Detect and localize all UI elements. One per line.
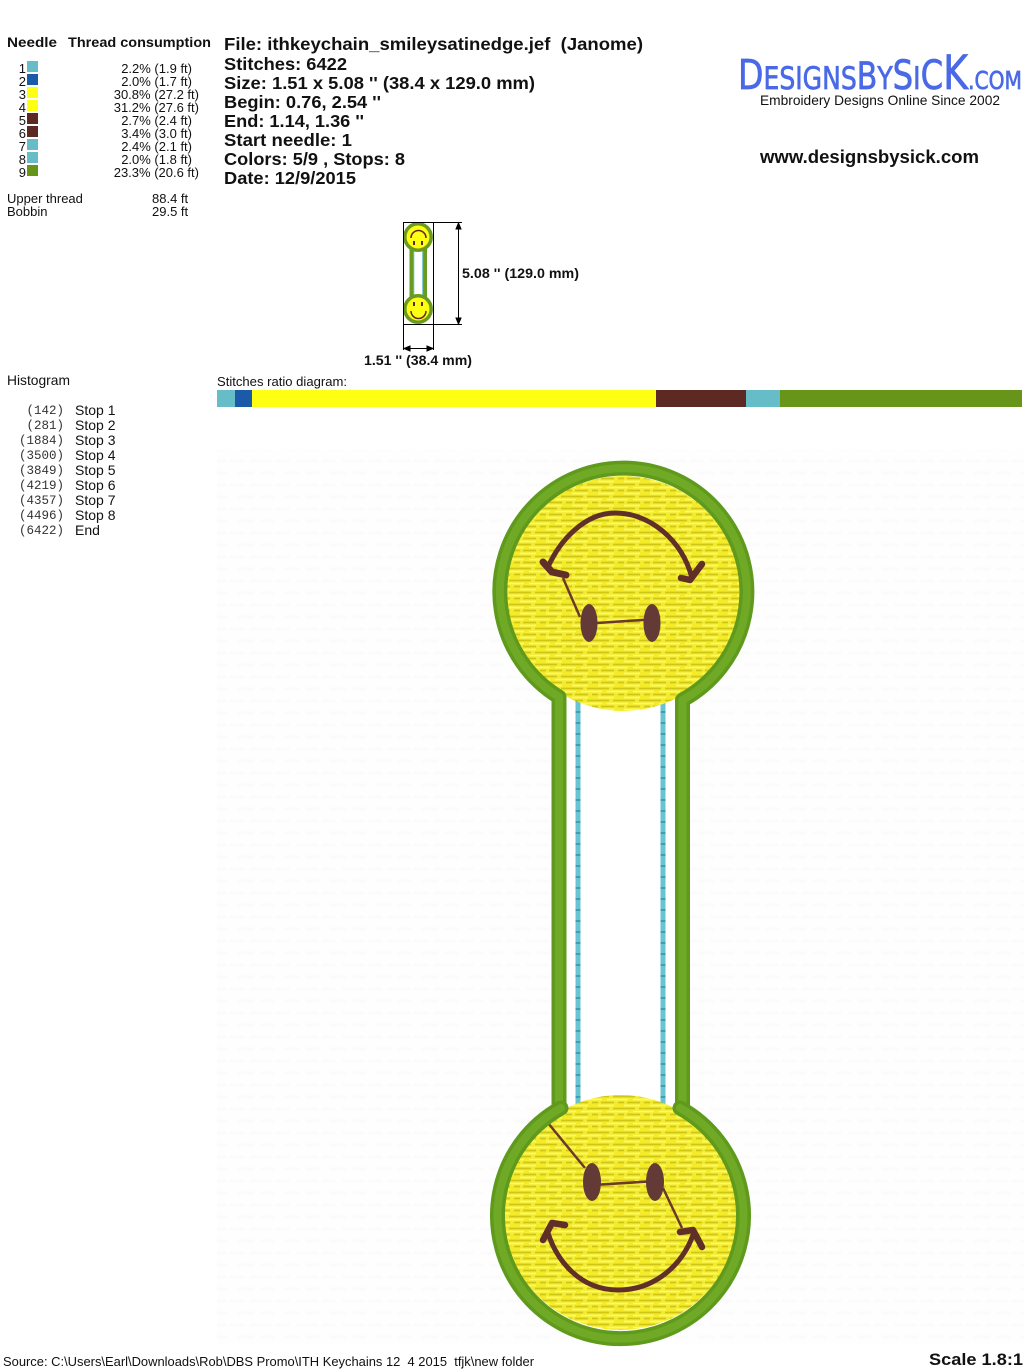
needle numbers: 2 [19,74,26,89]
stop labels: Stop 6 [75,477,116,493]
stitch counts: (3500) [19,449,64,463]
thread totals: 29.5 ft [152,204,189,219]
needle numbers: 9 [19,165,26,180]
needle numbers: 6 [19,126,26,141]
stop labels: Stop 2 [75,417,116,433]
thread percentages: 2.2% (1.9 ft) [121,61,192,76]
embroidered keychain preview [217,450,1024,1345]
stitches ratio diagram: Stitches ratio diagram: [217,374,347,389]
white strap centre [567,700,675,1110]
design info block: File: ithkeychain_smileysatinedge.jef (Janome) [224,34,643,54]
table header [7,35,211,50]
design info block: Stitches: 6422 [224,54,347,74]
design info block [224,34,643,188]
design info block: Begin: 0.76, 2.54 '' [224,92,381,112]
stop labels: End [75,522,100,538]
thin stitch lines [563,578,657,623]
yellow satin fill [503,1095,738,1330]
thumbnail with dimensions [364,222,579,368]
thread percentages: 2.0% (1.8 ft) [121,152,192,167]
stop labels: Stop 3 [75,432,116,448]
stop labels: Stop 4 [75,447,116,463]
thread percentages: 31.2% (27.6 ft) [114,100,199,115]
thread totals [7,191,189,219]
stitch counts: (4496) [19,509,64,523]
thread percentages: 30.8% (27.2 ft) [114,87,199,102]
table header: Thread consumption [68,35,211,50]
stitch counts [19,404,64,538]
source path: Source: C:\Users\Earl\Downloads\Rob\DBS Promo\ITH Keychains 12 4 2015 tfjk\new folder [3,1355,534,1369]
thumbnail design [405,224,431,322]
design info block: End: 1.14, 1.36 '' [224,111,364,131]
needle numbers: 7 [19,139,26,154]
thread totals: Upper thread [7,191,83,206]
stitches ratio diagram [217,374,1022,407]
stop labels: Stop 8 [75,507,116,523]
stitch counts: (1884) [19,434,64,448]
bottom smiley [503,1095,738,1330]
thread percentages: 2.0% (1.7 ft) [121,74,192,89]
stop labels [75,402,116,538]
width label: 1.51 '' (38.4 mm) [364,352,472,368]
top ring and green strap edges [500,468,747,1110]
design info block: Colors: 5/9 , Stops: 8 [224,149,405,169]
design info block: Date: 12/9/2015 [224,168,356,188]
histogram list [7,372,116,538]
thread percentages: 23.3% (20.6 ft) [114,165,199,180]
eyes [583,1163,664,1201]
thread percentages: 3.4% (3.0 ft) [121,126,192,141]
smile [543,1223,702,1290]
needle numbers: 5 [19,113,26,128]
scale label: Scale 1.8:1 [929,1350,1023,1369]
fabric background [217,450,1024,1345]
blue running stitches [578,700,663,1106]
stitch counts: (6422) [19,524,64,538]
needle numbers: 8 [19,152,26,167]
thread totals: 88.4 ft [152,191,189,206]
height label: 5.08 '' (129.0 mm) [462,265,579,281]
needle numbers: 4 [19,100,26,115]
yellow satin fill [506,476,740,711]
needle swatches [27,61,38,176]
thread totals: Bobbin [7,204,47,219]
stop labels: Stop 1 [75,402,116,418]
thread percentages: 2.7% (2.4 ft) [121,113,192,128]
thin stitch lines [548,1123,682,1228]
table header: Needle [7,35,58,50]
mouth [543,513,702,580]
stitch counts: (4219) [19,479,64,493]
top smiley [506,476,740,711]
eyes [580,604,660,642]
needle numbers [19,61,26,180]
stitch counts: (3849) [19,464,64,478]
bottom green ring [498,1108,744,1339]
stitch counts: (142) [26,404,64,418]
histogram heading: Histogram [7,372,70,388]
thread percentages: 2.4% (2.1 ft) [121,139,192,154]
stop labels: Stop 7 [75,492,116,508]
stitch counts: (4357) [19,494,64,508]
thread percentages [114,61,199,180]
stitch counts: (281) [26,419,64,433]
website url: www.designsbysick.com [759,147,979,167]
design info block: Size: 1.51 x 5.08 '' (38.4 x 129.0 mm) [224,73,535,93]
needle numbers: 3 [19,87,26,102]
dimension lines [404,222,462,351]
stop labels: Stop 5 [75,462,116,478]
logo: DesignsBySick.com: Embroidery Designs Online Since 2002 [760,92,1000,108]
design info block: Start needle: 1 [224,130,352,150]
needle numbers: 1 [19,61,26,76]
thread consumption table [7,35,211,219]
